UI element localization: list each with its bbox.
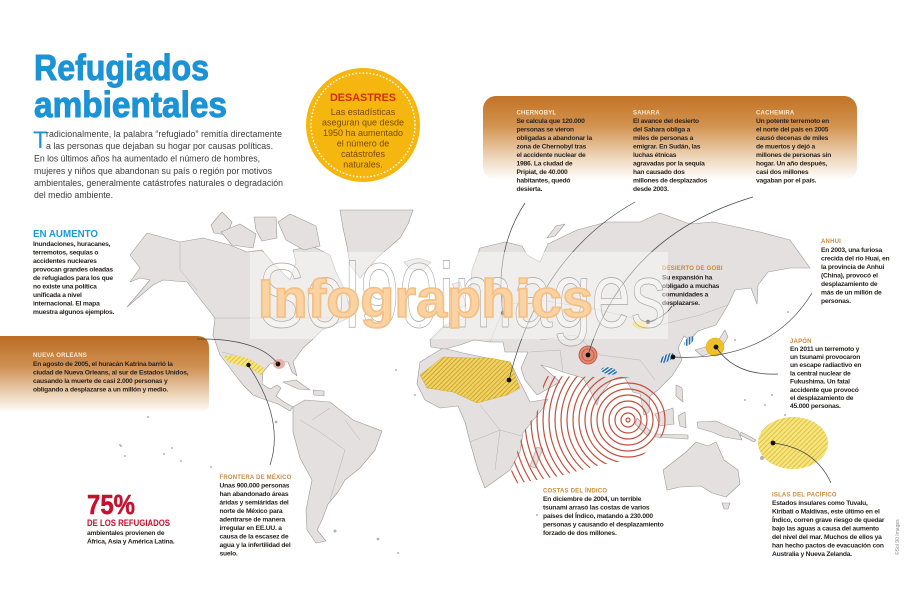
continent: Australia: [663, 442, 740, 497]
callout: Desastres circle: 1950 ha aumentado: [323, 128, 403, 138]
text: Japón: JAPÓN: [790, 337, 812, 345]
panel: top orange band: [483, 96, 857, 193]
intro text: radicionalmente, la palabra “refugiado” remitía directamente: [46, 129, 282, 139]
text: Cachemira: millones de personas sin: [756, 152, 831, 159]
zone: Mexico border strip: [224, 355, 264, 376]
text: En aumento: no existe una política: [33, 284, 97, 290]
text: Anhui: (China), provocó el: [821, 272, 878, 280]
stat: 75%: África, Asia y América Latina.: [87, 536, 175, 546]
text: Sahara: miles de personas a: [633, 135, 694, 142]
continent: Canadian Arctic islands: [211, 212, 320, 250]
text: Islas del Pacífico: del nivel del mar. Muchos de ellos ya: [772, 534, 882, 541]
zones: blue flood hatches: [601, 334, 696, 376]
island: Great Britain: [452, 282, 466, 310]
text: Islas del Pacífico: Estados insulares como Tuvalu,: [772, 500, 868, 507]
text: Desierto de Gobi: comunidades a: [662, 292, 709, 298]
text: Cachemira: de muertos y dejó a: [756, 144, 815, 150]
text: Sahara: luchas étnicas: [633, 152, 677, 159]
stat: 75%: DE LOS REFUGIADOS: [87, 518, 170, 529]
text: Frontera de México: suelo.: [220, 550, 238, 558]
text: Desierto de Gobi: obligado a muchas: [662, 283, 720, 290]
text: Japón: accidente que provocó: [790, 387, 859, 394]
text: Islas del Pacífico: han hecho pactos de evacuación con: [772, 542, 884, 550]
text: Chernobyl: obligadas a abandonar la: [516, 135, 592, 142]
zone: Kashmir red rings: [579, 346, 597, 364]
text: Chernobyl: 1986. La ciudad de: [516, 160, 573, 168]
text: Anhui: más de un millón de: [821, 290, 882, 296]
text: En aumento: [33, 228, 115, 316]
island: Novaya Zemlya: [547, 224, 565, 238]
text: Frontera de México: causa de la escasez de: [220, 534, 289, 540]
text: En aumento: provocan grandes oleadas: [33, 266, 113, 274]
zone: Sahara hatched area: [420, 357, 520, 403]
text: Anhui: ANHUI: [821, 239, 841, 245]
text: Cachemira: [756, 110, 831, 184]
island: Iceland: [404, 258, 431, 269]
text: En aumento: accidentes nucleares: [33, 258, 97, 265]
text: Japón: 45.000 personas.: [790, 403, 841, 410]
text: Anhui: desplazamiento de: [821, 281, 878, 288]
text: Cachemira: vagaban por el país.: [756, 178, 817, 184]
text: Desierto de Gobi: DESIERTO DE GOBI: [662, 266, 723, 272]
panel: Nueva Orleans band: [0, 336, 209, 413]
panel: Nueva Orleans band: obligando a desplazarse a un millón y medio.: [33, 386, 168, 394]
island: Japan: [695, 330, 728, 356]
text: En aumento: muestra algunos ejemplos.: [33, 309, 115, 316]
text: Japón: el desplazamiento de: [790, 395, 854, 402]
text: En aumento: de refugiados para los que: [33, 275, 113, 282]
text: Frontera de México: han abandonado áreas: [220, 491, 289, 498]
intro text: mujeres y niños que abandonan su país o región por motivos: [34, 166, 273, 176]
island: Madagascar: [530, 447, 543, 468]
text: Frontera de México: adentrarse de manera: [220, 516, 285, 524]
text: Costas del Índico: [543, 486, 664, 537]
callout: Desastres circle: aseguran que desde: [322, 118, 404, 128]
text: Islas del Pacífico: ISLAS DEL PACÍFICO: [772, 490, 837, 498]
watermark: Infographics: [258, 269, 593, 329]
text: Anhui: En 2003, una furiosa: [821, 247, 883, 254]
continent: North America: [127, 233, 352, 411]
stat: 75%: ambientales provienen de: [87, 530, 165, 537]
text: En aumento: internacional. El mapa: [33, 300, 100, 308]
text: Chernobyl: Se calcula que 120.000: [516, 118, 585, 125]
text: Costas del Índico: tsunami arrasó las costas de varios: [543, 504, 650, 512]
intro text: T: [33, 127, 48, 154]
text: Anhui: la provincia de Anhui: [821, 264, 885, 271]
callout: Desastres circle: naturales.: [343, 160, 383, 170]
stat: 75%: [87, 489, 175, 546]
text: Sahara: [633, 110, 708, 193]
panel: Nueva Orleans band: ciudad de Nueva Orleans, al sur de Estados Unidos,: [33, 370, 189, 376]
text: Frontera de México: Unas 900.000 personas: [220, 482, 290, 490]
text: Sahara: han causado dos: [633, 169, 685, 176]
text: Sahara: desde 2003.: [633, 186, 669, 193]
intro text: del medio ambiente.: [34, 190, 113, 200]
text: Sahara: El avance del desierto: [633, 118, 699, 125]
text: Anhui: personas.: [821, 298, 851, 305]
continent: Africa: [417, 348, 548, 488]
title: Refugiados: [34, 47, 209, 88]
copyright: ©Sol 90 Images: [894, 519, 901, 555]
intro text: [33, 127, 283, 200]
text: Anhui: crecida del río Huai, en: [821, 256, 890, 262]
text: Costas del Índico: forzado de dos millones.: [543, 530, 617, 537]
text: En aumento: Inundaciones, huracanes,: [33, 241, 111, 248]
callout: Desastres circle: Las estadísticas: [331, 107, 396, 117]
stat: 75%: 75%: [87, 489, 135, 520]
text: Chernobyl: habitantes, quedó: [516, 178, 570, 184]
text: Japón: [790, 337, 861, 410]
text: Desierto de Gobi: desplazarse.: [662, 300, 700, 307]
text: En aumento: unificada a nivel: [33, 292, 82, 299]
zone: New Orleans: [273, 359, 285, 369]
intro text: ambientales, generalmente catástrofes naturales o degradación: [34, 178, 283, 188]
zone: Pacific Islands hatched ellipse: [758, 417, 828, 469]
callout: Desastres circle: DESASTRES: [330, 92, 396, 104]
text: Japón: Fukushima. Un fatal: [790, 379, 850, 386]
text: Japón: En 2011 un terremoto y: [790, 346, 860, 353]
leader lines and markers: [246, 197, 831, 483]
intro text: a las personas que dejaban su hogar por causas políticas.: [46, 141, 273, 151]
text: Cachemira: el norte del país en 2005: [756, 126, 829, 134]
text: Anhui: [821, 239, 890, 305]
islands: Indonesia and New Guinea: [635, 385, 756, 442]
text: Sahara: millones de desplazados: [633, 178, 708, 184]
text: Sahara: agravadas por la sequía: [633, 160, 705, 168]
text: Japón: un escape radiactivo en: [790, 362, 861, 369]
text: Costas del Índico: países del Índico, matando a 230.000: [543, 511, 653, 520]
intro text: En los últimos años ha aumentado el número de hombres,: [34, 154, 260, 164]
text: Cachemira: casi dos millones: [756, 169, 809, 176]
islands: Caribbean: [283, 380, 324, 396]
leader line: Nueva Orleans: [197, 339, 278, 364]
zone: Gobi: [631, 319, 649, 331]
world map: [119, 210, 810, 554]
text: Islas del Pacífico: bajo las aguas a causa del aumento: [772, 526, 879, 532]
text: Frontera de México: FRONTERA DE MÉXICO: [220, 473, 292, 481]
text: Frontera de México: áridas y semiáridas del: [220, 500, 289, 506]
panel: Nueva Orleans band: En agosto de 2005, el huracán Katrina barrió la: [33, 361, 173, 368]
panel: Nueva Orleans band: NUEVA ORLEANS: [33, 353, 87, 359]
island: Tasmania: [722, 503, 730, 509]
callout: Desastres circle: el número de: [337, 138, 389, 148]
text: Japón: un tsunami provocaron: [790, 354, 860, 361]
text: Costas del Índico: personas y causando el desplazamiento: [543, 522, 664, 528]
text: Islas del Pacífico: Kiribati o Maldivas, este último en el: [772, 508, 880, 516]
text: En aumento: terremotos, sequías o: [33, 250, 98, 256]
text: Islas del Pacífico: [772, 490, 885, 558]
text: Desierto de Gobi: Su expansión ha: [662, 274, 713, 282]
zone: Indian Ocean tsunami rings: [511, 376, 666, 484]
continent: Greenland: [340, 210, 413, 278]
callout: Desastres circle: [306, 68, 420, 182]
text: Frontera de México: norte de México para: [220, 508, 283, 515]
continent: Eurasia: [430, 213, 810, 415]
text: Sahara: emigrar. En Sudán, las: [633, 144, 701, 150]
text: Costas del Índico: COSTAS DEL ÍNDICO: [543, 486, 607, 494]
continent: South America: [293, 400, 382, 543]
text: Japón: la central nuclear de: [790, 370, 851, 377]
text: Frontera de México: irregular en EE.UU. a: [220, 525, 282, 532]
text: Frontera de México: agua y la infertilidad del: [220, 542, 291, 549]
country borders: [180, 242, 728, 500]
text: Sahara: SAHARA: [633, 110, 660, 116]
text: Chernobyl: [516, 110, 592, 193]
panel: Nueva Orleans band: causando la muerte de casi 2.000 personas y: [33, 378, 168, 385]
text: Chernobyl: CHERNOBYL: [516, 110, 556, 116]
text: Islas del Pacífico: Índico, corren grave riesgo de quedar: [772, 515, 885, 524]
islands: small specks: [119, 311, 789, 554]
callout: Desastres circle: catástrofes: [341, 149, 386, 159]
text: Cachemira: CACHEMIRA: [756, 110, 795, 116]
text: Chernobyl: Pripiat, de 40.000: [516, 169, 568, 176]
watermark: Sol90images: [258, 245, 666, 347]
text: Chernobyl: personas se vieron: [516, 126, 574, 134]
text: Chernobyl: el accidente nuclear de: [516, 152, 586, 159]
title: ambientales: [34, 84, 227, 125]
text: Costas del Índico: En diciembre de 2004, un terrible: [543, 496, 642, 503]
text: Chernobyl: zona de Chernobyl tras: [516, 144, 587, 150]
text: Cachemira: hogar. Un año después,: [756, 160, 827, 168]
text: Cachemira: Un potente terremoto en: [756, 118, 829, 125]
title: [34, 47, 227, 125]
zone: Japan yellow circle: [706, 338, 724, 356]
text: Islas del Pacífico: Australia y Nueva Zelanda.: [772, 551, 852, 558]
text: En aumento: EN AUMENTO: [33, 228, 98, 240]
text: Chernobyl: desierta.: [516, 186, 543, 193]
text: Frontera de México: [220, 473, 292, 558]
text: Cachemira: causó decenas de miles: [756, 135, 829, 142]
text: Sahara: del Sahara obliga a: [633, 126, 691, 134]
text: Desierto de Gobi: [662, 266, 723, 307]
